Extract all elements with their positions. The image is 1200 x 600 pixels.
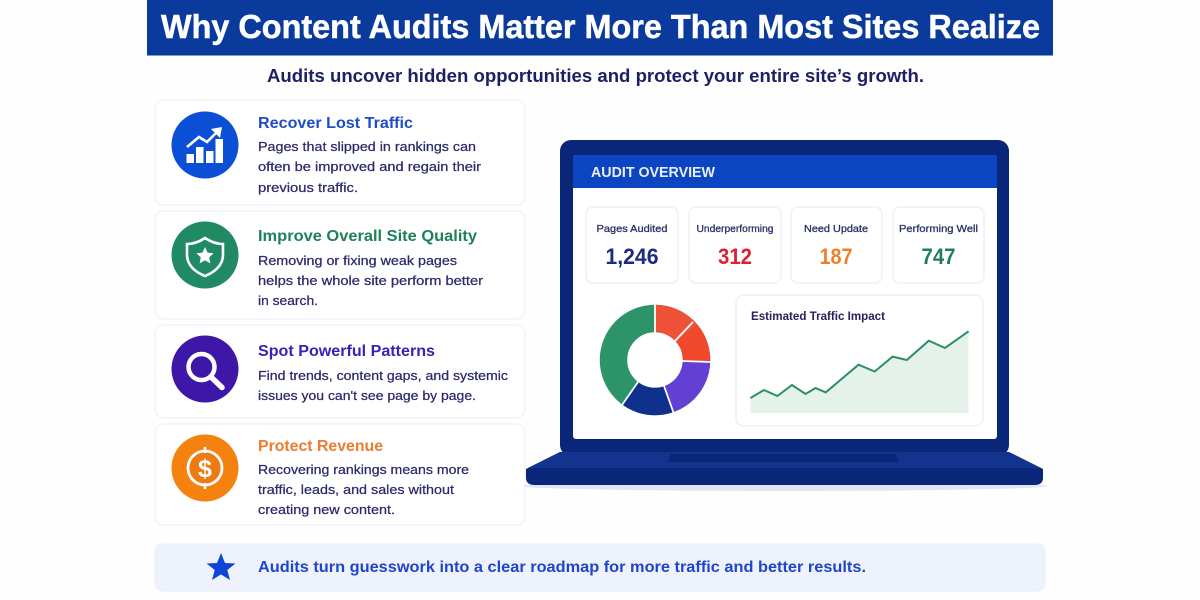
stat card: need update: 187 bbox=[820, 244, 852, 269]
panel: improve overall site quality bbox=[155, 211, 525, 319]
body text: Find trends, content gaps, and systemic bbox=[258, 368, 509, 383]
body text bbox=[258, 253, 484, 308]
takeaway text: Audits turn guesswork into a clear roadmap for more traffic and better results. bbox=[258, 559, 866, 576]
stat card: underperforming: 312 bbox=[718, 244, 752, 269]
stat card: pages audited: 1,246 bbox=[606, 244, 658, 269]
heading: Improve Overall Site Quality bbox=[258, 228, 477, 245]
icon: magnifying glass bbox=[172, 336, 238, 402]
heading: Recover Lost Traffic bbox=[258, 115, 413, 132]
body text: previous traffic. bbox=[258, 180, 358, 195]
stat card: performing well: 747 bbox=[922, 244, 956, 269]
icon: star bbox=[206, 553, 236, 580]
line chart: estimated traffic impact: Estimated Traffic Impact bbox=[751, 311, 885, 323]
stat card: underperforming bbox=[689, 207, 781, 283]
laptop illustration bbox=[523, 140, 1047, 491]
panel: spot powerful patterns bbox=[155, 325, 525, 418]
icon: rising bar chart bbox=[172, 112, 238, 178]
body text bbox=[258, 139, 482, 195]
stat card: pages audited: Pages Audited bbox=[596, 223, 668, 235]
stat card: performing well bbox=[893, 207, 984, 283]
body text: Pages that slipped in rankings can bbox=[258, 139, 476, 154]
body text: Removing or fixing weak pages bbox=[258, 253, 458, 268]
laptop base bbox=[526, 452, 1043, 485]
panel: recover lost traffic bbox=[155, 100, 525, 205]
body text: often be improved and regain their bbox=[258, 159, 482, 174]
callout: bottom takeaway bbox=[155, 544, 1045, 591]
laptop bezel bbox=[560, 140, 1009, 456]
body text: helps the whole site perform better bbox=[258, 273, 484, 288]
icon: shield with star bbox=[172, 222, 238, 288]
heading: Spot Powerful Patterns bbox=[258, 343, 435, 360]
panel: protect revenue bbox=[155, 424, 525, 525]
body text bbox=[258, 368, 509, 403]
icon: dollar coin bbox=[172, 434, 238, 502]
stat card: need update: Need Update bbox=[804, 223, 868, 235]
stat card: performing well: Performing Well bbox=[899, 223, 978, 235]
screen header bbox=[573, 155, 997, 188]
line chart: estimated traffic impact bbox=[736, 295, 983, 426]
stat card: pages audited bbox=[586, 207, 678, 283]
icon: dollar coin: $ bbox=[198, 455, 212, 483]
screen header: AUDIT OVERVIEW bbox=[591, 165, 715, 181]
subtitle: Audits uncover hidden opportunities and protect your entire site’s growth. bbox=[267, 66, 924, 86]
body text: creating new content. bbox=[258, 502, 395, 517]
stat card: underperforming: Underperforming bbox=[696, 223, 774, 235]
title banner bbox=[147, 0, 1053, 56]
body text: traffic, leads, and sales without bbox=[258, 482, 454, 497]
title banner: Why Content Audits Matter More Than Most Sites Realize bbox=[161, 8, 1040, 45]
body text bbox=[258, 462, 469, 517]
stat card: need update bbox=[791, 207, 882, 283]
laptop screen bbox=[573, 155, 997, 439]
body text: Recovering rankings means more bbox=[258, 462, 469, 477]
body text: issues you can't see page by page. bbox=[258, 388, 476, 403]
donut chart bbox=[614, 304, 711, 414]
heading: Protect Revenue bbox=[258, 438, 383, 455]
body text: in search. bbox=[258, 293, 318, 308]
